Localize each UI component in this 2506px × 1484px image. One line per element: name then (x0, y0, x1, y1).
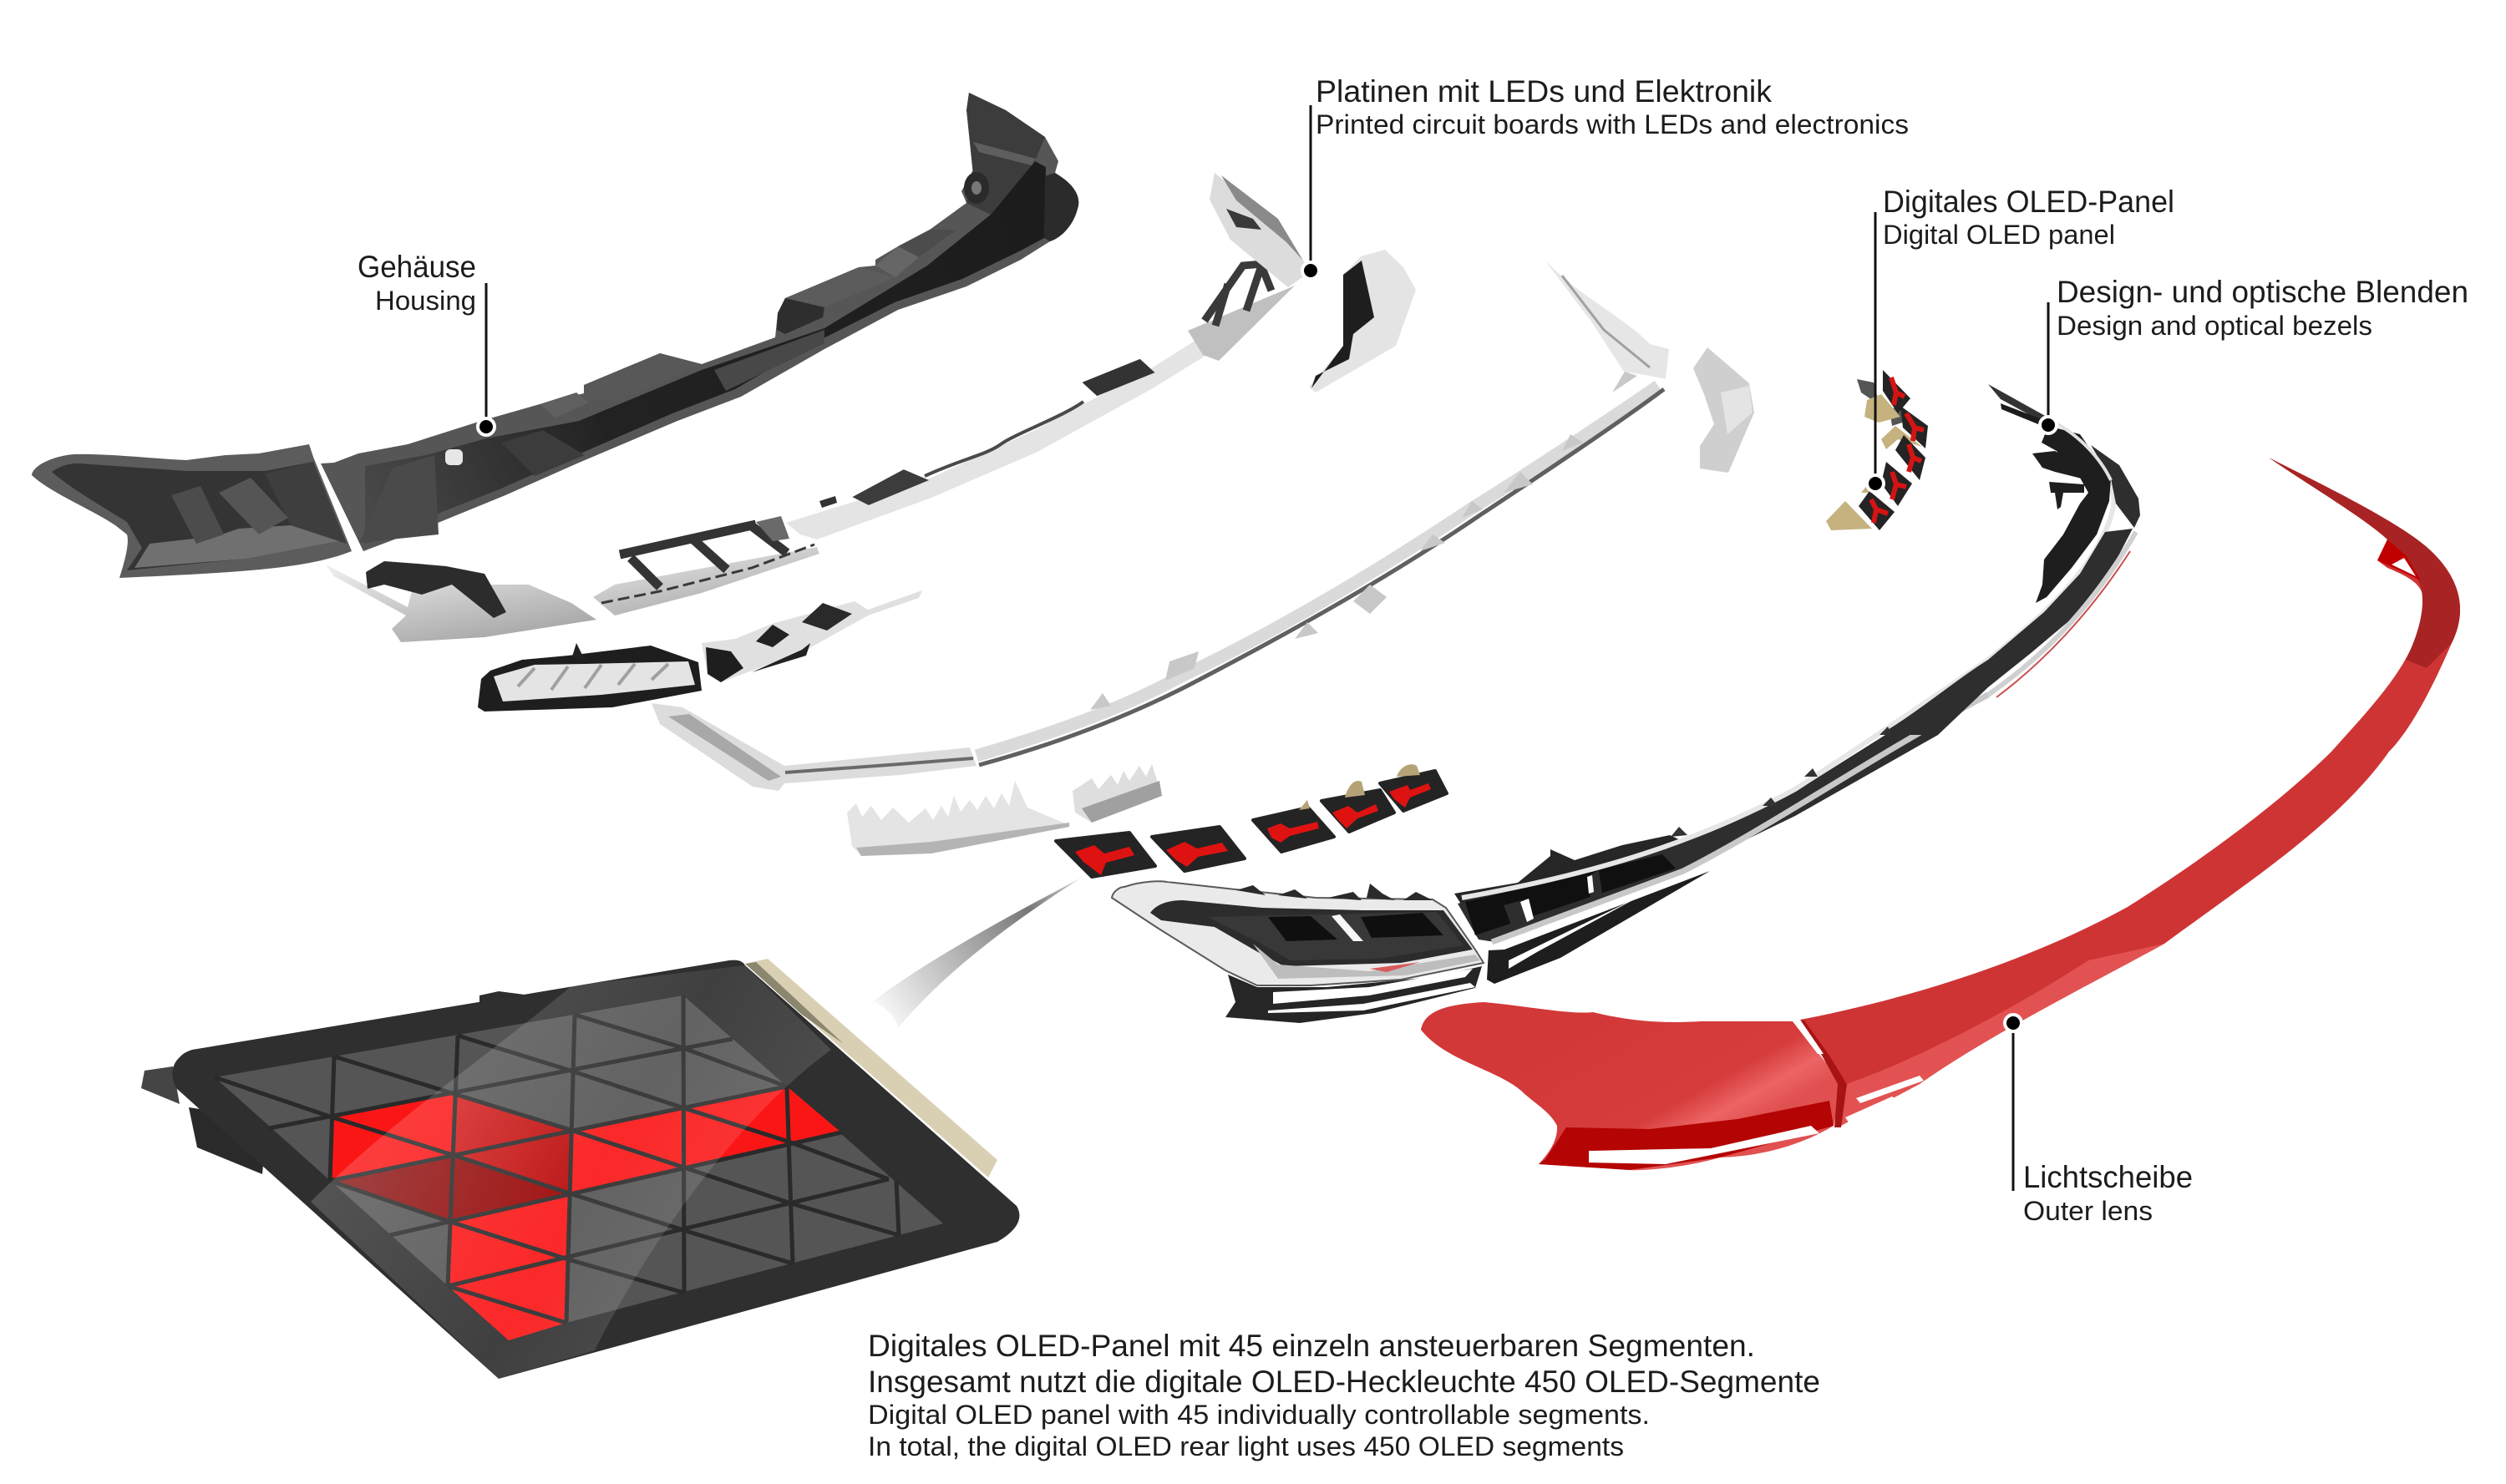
component: design and optical bezels, lower left piece (1112, 881, 1484, 1023)
component: light guides and reflectors (478, 250, 1416, 712)
label: outer lens (2003, 1013, 2193, 1226)
caption text block: Digital OLED panel with 45 individually controllable segments. (868, 1400, 1650, 1430)
panel body (172, 960, 1019, 1379)
component: optical light guide (652, 260, 1754, 791)
label: design and optical bezels (2038, 275, 2468, 435)
label: digital OLED panel (1865, 185, 2174, 494)
segment dividers (215, 995, 899, 1323)
lit segments (330, 1086, 841, 1340)
component: printed circuit boards (326, 173, 1311, 642)
panel connector and housing (141, 959, 997, 1178)
small OLED panels stack (1826, 370, 1928, 530)
label: design and optical bezels: Design and optical bezels (2057, 311, 2372, 341)
label: circuit boards: Printed circuit boards with LEDs and electronics (1316, 109, 1909, 139)
segment grid (215, 995, 943, 1340)
zoom wedge connector (873, 879, 1080, 1027)
label: digital OLED panel: Digitales OLED-Panel (1883, 185, 2174, 219)
enlarged digital OLED panel (141, 959, 1019, 1379)
caption text block: Insgesamt nutzt die digitale OLED-Heckleuchte 450 OLED-Segmente (868, 1365, 1820, 1399)
caption text block: Digitales OLED-Panel mit 45 einzeln ansteuerbaren Segmenten. (868, 1329, 1755, 1363)
label: circuit boards (1301, 74, 1909, 281)
label: circuit boards: Platinen mit LEDs und Elektronik (1316, 74, 1773, 109)
caption text block: In total, the digital OLED rear light uses 450 OLED segments (868, 1431, 1624, 1461)
component: design and optical bezels, long band (1454, 384, 2140, 984)
component: housing (32, 93, 1078, 578)
label: housing: Housing (375, 286, 476, 316)
small OLED panels row (1056, 764, 1447, 877)
glass highlight (311, 965, 831, 1379)
label: housing: Gehäuse (358, 250, 476, 284)
label: outer lens: Lichtscheibe (2023, 1160, 2193, 1194)
label: housing (358, 250, 496, 437)
component: comb reflectors (847, 764, 1162, 856)
label: outer lens: Outer lens (2023, 1196, 2153, 1226)
caption text block (868, 1329, 1820, 1461)
label: digital OLED panel: Digital OLED panel (1883, 220, 2115, 250)
component: outer lens (1421, 458, 2460, 1170)
label: design and optical bezels: Design- und optische Blenden (2057, 275, 2468, 309)
